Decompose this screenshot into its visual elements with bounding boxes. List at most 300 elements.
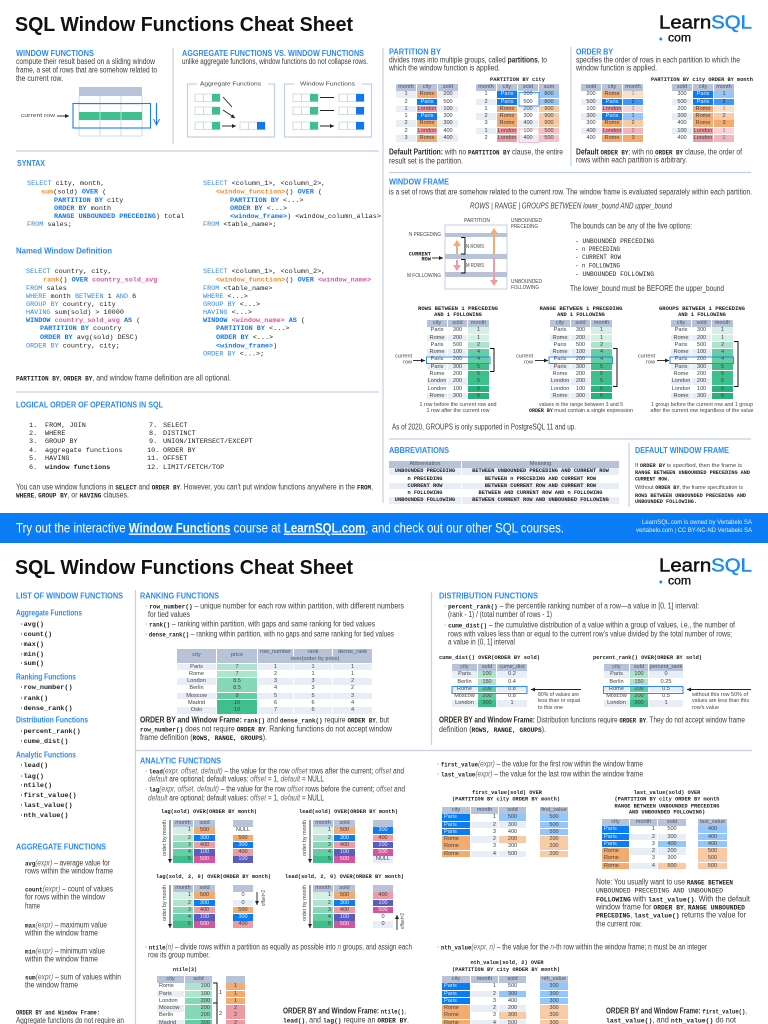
- chart: percent_rank example: 0.5: [662, 693, 670, 699]
- table: CURRENT ROW: [408, 483, 442, 489]
- table: ranking comparison: 2: [351, 678, 354, 684]
- chart: lag example: 400: [200, 842, 209, 848]
- table title: AND 1 FOLLOWING: [557, 312, 605, 318]
- table: partitioned: 500: [523, 99, 533, 105]
- table: ranking comparison: price: [231, 652, 243, 658]
- table: 200: [453, 356, 462, 362]
- chart: lag with offset: 4: [188, 914, 191, 920]
- table: 500: [576, 342, 585, 348]
- chart: percent_rank example: percent_rank() OVER(ORDER BY sold): [593, 655, 702, 661]
- table: Paris: [675, 342, 687, 348]
- table: ranking comparison: rank: [308, 649, 318, 655]
- table: Rome: [674, 349, 688, 355]
- code: syntax template: PARTITION BY <...>: [230, 197, 303, 205]
- panel: logical order of operations: [16, 400, 373, 500]
- chart: last_value example: 2: [652, 834, 655, 840]
- group: ranking: Ranking Functions: [16, 672, 77, 682]
- table title: RANGE BETWEEN 1 PRECEDING: [540, 306, 622, 312]
- chart: lag with offset: 0: [241, 892, 245, 898]
- group: analytic: ·ntile(): [20, 782, 52, 790]
- code: named window template: <window_frame>): [216, 342, 277, 350]
- chart: ntile example: ntile(3): [173, 967, 197, 973]
- chart: percent_rank example: values are less than this: [692, 698, 749, 704]
- lead and lag descriptions: [145, 766, 405, 802]
- table: Paris: [675, 327, 687, 333]
- table: unpartitioned: month: [398, 84, 414, 90]
- table: ranking comparison: 3: [274, 678, 277, 684]
- heading: LIST OF WINDOW FUNCTIONS: [16, 592, 123, 600]
- table: partitioned: 3: [484, 120, 488, 126]
- code: named window template: WHERE <...>: [203, 293, 248, 301]
- bounds list: The bounds can be any of the five options:: [570, 222, 692, 230]
- text: ROWS BETWEEN UNBOUNDED PRECEDING AND: [635, 493, 746, 499]
- chart: lag example: 500: [200, 827, 209, 833]
- table: partitioned: [476, 84, 559, 144]
- chart: lead example: 500: [378, 849, 388, 855]
- diagram: partition bounds: [407, 218, 542, 291]
- chart: cume_dist example: 200: [482, 686, 492, 692]
- heading: DISTRIBUTION FUNCTIONS: [439, 592, 538, 600]
- chart: lead with offset: 300: [340, 900, 349, 906]
- ordered list right: 8.: [149, 430, 157, 438]
- table: 4: [721, 356, 724, 362]
- table: unpartitioned: 2: [404, 120, 408, 126]
- ordered list left: 1.: [29, 422, 37, 430]
- chart: nth_value example: 2: [493, 991, 496, 997]
- order by note: ORDER BY and Window Frame: ntile(),: [283, 1006, 406, 1016]
- chart: lead example: NULL: [376, 856, 390, 862]
- group: aggregate: Aggregate Functions: [16, 608, 83, 618]
- table title: AND 1 FOLLOWING: [434, 312, 482, 318]
- table: Paris: [675, 364, 687, 370]
- chart: lead with offset: month: [315, 885, 331, 891]
- table: unpartitioned: city: [423, 84, 431, 90]
- table: 5: [721, 364, 724, 370]
- chart: lead example: 2: [328, 835, 331, 841]
- chart: nth_value example: Paris: [444, 983, 457, 989]
- definition text: compute their result based on a sliding window: [16, 57, 155, 66]
- table: unordered: Rome: [605, 135, 619, 141]
- note on last_value: window frame for ORDER BY, RANGE UNBOUNDED: [595, 902, 745, 912]
- table: ranking comparison: 4: [351, 707, 354, 713]
- table: ordered: 2: [722, 99, 726, 105]
- table: 200: [576, 356, 585, 362]
- table: ranking comparison: Berlin: [189, 685, 204, 691]
- chart: lead with offset: lead(sold, 2, 0) OVER(ORDER BY month): [285, 874, 404, 880]
- description: window function is applied.: [575, 64, 657, 72]
- table: partitioned: 400: [523, 120, 533, 126]
- chart: lag example: 100: [200, 849, 209, 855]
- table: 6: [477, 393, 480, 399]
- current row marker: row: [646, 360, 656, 366]
- code: named window example: [26, 268, 157, 350]
- chart: percent_rank example: percent_rank: [650, 664, 682, 670]
- table: ranking comparison: 4: [274, 685, 277, 691]
- table: 200: [453, 378, 462, 384]
- heading: WINDOW FUNCTIONS: [16, 49, 94, 58]
- chart: lead with offset: [285, 874, 406, 930]
- table: 1: [477, 327, 480, 333]
- table: Rome: [430, 335, 444, 341]
- table label: PARTITION BY city ORDER BY month: [651, 77, 753, 83]
- order by note: frame definition (ROWS, RANGE, GROUPS).: [140, 733, 267, 743]
- chart: last_value example: last_value(sold) OVER: [634, 790, 701, 796]
- chart: last_value example: 400: [708, 834, 717, 840]
- table: ordered: London: [694, 128, 712, 134]
- order by note: ORDER BY and Window Frame: Distribution functions require ORDER BY. They do not accept window frame: [439, 716, 745, 726]
- ordered list left: 4.: [29, 447, 37, 455]
- table: 100: [697, 349, 706, 355]
- table: ranking comparison: 1: [311, 664, 315, 670]
- chart: first_value example: first_value(sold) OVER: [472, 790, 543, 796]
- table: unordered: month: [625, 84, 641, 90]
- heading: PARTITION BY: [389, 48, 442, 56]
- current row marker: current: [395, 354, 412, 360]
- default partition note: [389, 148, 563, 166]
- diagram: partition bounds: N ROWS: [466, 244, 484, 250]
- table: 100: [576, 386, 585, 392]
- chart: first_value example: 200: [549, 851, 559, 857]
- chart: nth_value example: city: [452, 976, 460, 982]
- table: unpartitioned: 3: [404, 135, 408, 141]
- table: ordered: 1: [722, 91, 726, 97]
- chart: percent_rank example: 200: [634, 693, 644, 699]
- caption: [529, 402, 633, 414]
- table: partitioned: 400: [523, 135, 533, 141]
- chart: lag with offset: offset=2: [261, 890, 267, 906]
- table: [389, 461, 619, 505]
- text: [635, 463, 750, 505]
- table: BETWEEN n PRECEDING AND CURRENT ROW: [485, 476, 596, 482]
- chart: lead with offset: sold: [339, 885, 350, 891]
- table: 5: [721, 371, 724, 377]
- page 2 logo: com: [668, 576, 691, 588]
- table: unpartitioned: 300: [443, 113, 453, 119]
- code: named window example: ORDER BY country, city;: [26, 342, 120, 350]
- table: 100: [576, 349, 585, 355]
- chart: percent_rank example: city: [612, 664, 621, 670]
- code: named window example: SELECT country, city,: [26, 268, 112, 276]
- table: partitioned: 100: [523, 128, 533, 134]
- chart: cume_dist example: to this one: [538, 705, 563, 711]
- page 2 logo: Learn SQL: [659, 554, 752, 576]
- caption: values in the range between 3 and 5: [539, 402, 623, 408]
- ordered list right: ORDER BY: [163, 447, 196, 455]
- ordered list right: 9.: [149, 438, 157, 446]
- table: Rome: [553, 393, 567, 399]
- heading: AGGREGATE FUNCTIONS: [16, 842, 106, 852]
- chart: first_value example: first_value: [541, 807, 567, 813]
- table: BETWEEN CURRENT ROW AND CURRENT ROW: [485, 483, 596, 489]
- table: unordered: Rome: [605, 91, 619, 97]
- ordered list left: [29, 422, 122, 472]
- banner credits: LearnSQL.com is owned by Vertabelo SA: [642, 519, 753, 526]
- order by note: [606, 1006, 747, 1024]
- diagram: partition bounds: UNBOUNDED: [511, 218, 542, 224]
- chart: cume_dist example: 0.4: [508, 679, 516, 685]
- chart: lead example: 1: [328, 827, 331, 833]
- table: Paris: [431, 364, 443, 370]
- chart: ntile example: 200: [201, 1005, 210, 1011]
- chart: nth_value example: 300: [508, 1012, 517, 1018]
- table: unordered: 3: [631, 135, 635, 141]
- ntile description: · ntile(n) – divide rows within a partition as equally as possible into n groups, and assign each: [145, 942, 412, 952]
- table: 1: [600, 327, 603, 333]
- table: unpartitioned: 100: [443, 106, 453, 112]
- default partition note: result set is the partition.: [389, 156, 463, 166]
- code: syntax example: SELECT city, month,: [27, 180, 105, 188]
- group: analytic: Analytic Functions: [16, 750, 77, 760]
- chart: nth_value example: 200: [508, 1005, 517, 1011]
- table: London: [672, 386, 690, 392]
- chart: first_value example: 500: [549, 829, 559, 835]
- chart: first_value example: Rome: [444, 836, 459, 842]
- chart: percent_rank example: 0.25: [661, 679, 671, 685]
- table: BETWEEN AND CURRENT ROW AND n FOLLOWING: [479, 490, 602, 496]
- ordered list left: 3.: [29, 438, 37, 446]
- chart: ntile example: 200: [201, 998, 210, 1004]
- ntile description: [145, 942, 412, 960]
- table: 100: [697, 386, 706, 392]
- table: partitioned: month: [478, 84, 494, 90]
- chart: lead with offset: 500: [378, 907, 388, 913]
- code: named window template: ORDER BY <...>;: [203, 350, 264, 358]
- function descriptions: the window frame: [25, 980, 78, 990]
- table: Paris: [554, 364, 566, 370]
- diagram: partition bounds: N PRECEDING: [409, 232, 441, 238]
- chart: lead example: [299, 809, 398, 864]
- table: city: [556, 320, 564, 326]
- current row marker: [516, 348, 617, 386]
- chart: first_value example: 3: [493, 829, 496, 835]
- chart: lag example: 500: [200, 856, 209, 862]
- chart: lag with offset: 400: [238, 921, 248, 927]
- heading: named window definition: Named Window Definition: [16, 246, 112, 256]
- table: unordered: 200: [586, 91, 596, 97]
- table: 2: [600, 342, 603, 348]
- table: London: [428, 386, 446, 392]
- chart: nth_value example: (PARTITION BY city ORDER BY month): [452, 967, 560, 973]
- table: Rome: [674, 371, 688, 377]
- chart: lead with offset: 400: [378, 892, 388, 898]
- table: ranking comparison: city: [192, 652, 201, 658]
- group: analytic: ·nth_value(): [20, 812, 68, 820]
- table: 5: [600, 371, 603, 377]
- diagram: partition bounds: UNBOUNDED: [511, 279, 542, 285]
- table: 500: [453, 342, 462, 348]
- chart: first_value example: Paris: [444, 814, 457, 820]
- chart: lead example: month: [315, 820, 331, 826]
- chart: lag example: order by month: [162, 820, 168, 856]
- group: distribution: ·cume_dist(): [20, 738, 68, 746]
- chart: nth_value example: 1: [493, 983, 496, 989]
- code: named window template: PARTITION BY <...>: [216, 325, 289, 333]
- descriptions: · last_value(expr) – the value for the last row within the window frame: [437, 770, 643, 780]
- table: ordered: city: [699, 84, 707, 90]
- chart: lag example: 300: [200, 835, 209, 841]
- table: unpartitioned: 400: [443, 135, 453, 141]
- chart: percent_rank example: 0.5: [662, 686, 670, 692]
- chart: first_value example: [442, 790, 568, 859]
- chart: lag with offset: 2: [188, 900, 191, 906]
- text: RANGE BETWEEN UNBOUNDED PRECEDING AND: [635, 470, 750, 476]
- chart: last_value example: 3: [652, 841, 655, 847]
- table: Paris: [554, 327, 566, 333]
- table: month: [471, 320, 486, 326]
- table: Rome: [430, 393, 444, 399]
- chart: nth_value example: 300: [549, 991, 559, 997]
- chart: lead with offset: 5: [328, 921, 331, 927]
- banner credits: [636, 519, 753, 534]
- chart: lead with offset: 4: [328, 914, 331, 920]
- chart: cume_dist example: 0.2: [508, 671, 516, 677]
- group: ranking: [16, 672, 77, 713]
- description: which the window function is applied.: [388, 64, 500, 72]
- chart: lead example: 500: [340, 827, 349, 833]
- table: unordered: London: [603, 128, 621, 134]
- chart: cume_dist example: Moscow: [454, 693, 475, 699]
- table: ordered: 500: [677, 99, 687, 105]
- table: partitioned: 900: [544, 120, 554, 126]
- table: unpartitioned: sold: [443, 84, 453, 90]
- chart: ntile example: 100: [201, 991, 210, 997]
- group: distribution: ·percent_rank(): [20, 728, 81, 736]
- chart: last_value example: [602, 790, 727, 871]
- chart: lead example: 100: [378, 842, 388, 848]
- code: named window template: [203, 268, 371, 358]
- example: rows between: [395, 306, 498, 414]
- heading: AGGREGATE FUNCTIONS VS. WINDOW FUNCTIONS: [182, 49, 364, 58]
- table label: PARTITION BY city: [490, 77, 546, 83]
- table: 300: [697, 327, 706, 333]
- chart: first_value example: 200: [549, 843, 559, 849]
- chart: cume_dist example: Berlin: [457, 679, 472, 685]
- chart: lag with offset: 300: [200, 900, 209, 906]
- table: ordered: 200: [677, 106, 687, 112]
- note: PARTITION BY, ORDER BY, and window frame definition are all optional.: [16, 374, 231, 384]
- table title: ROWS BETWEEN 1 PRECEDING: [418, 306, 498, 312]
- chart: percent_rank example: Moscow: [606, 693, 627, 699]
- heading: DEFAULT WINDOW FRAME: [635, 446, 729, 455]
- table: ordered: 400: [677, 120, 687, 126]
- function descriptions: max(expr) – maximum value: [25, 920, 107, 930]
- chart: ntile example: 2: [219, 1011, 222, 1017]
- chart: last_value example: Paris: [604, 834, 617, 840]
- chart: lag example: 4: [188, 849, 191, 855]
- table: ordered: 2: [722, 113, 726, 119]
- code: syntax template: <window_frame>) <window_column_alias>: [230, 213, 381, 221]
- chart: lag with offset: 3: [188, 907, 191, 913]
- diagram: partition bounds: FOLLOWING: [511, 285, 539, 291]
- panel: first, last and nth value: [437, 760, 751, 1024]
- table: unordered: 2: [631, 120, 635, 126]
- code: named window example: WHERE month BETWEEN 1 AND 6: [26, 293, 136, 301]
- ordered list right: UNION/INTERSECT/EXCEPT: [163, 438, 253, 446]
- table: ranking comparison: 2: [351, 685, 354, 691]
- table: ranking comparison: 1: [351, 671, 354, 677]
- table: Rome: [674, 335, 688, 341]
- note: [16, 482, 373, 500]
- table: Rome: [430, 371, 444, 377]
- chart: nth_value example: 3: [493, 1012, 496, 1018]
- chart: last_value example: 500: [667, 826, 677, 832]
- diagram: aggregate functions: Aggregate Functions: [200, 82, 261, 88]
- diagram: window functions: [284, 82, 372, 137]
- chart: last_value example: Paris: [604, 826, 617, 832]
- chart: lag example: 500: [238, 835, 248, 841]
- order by note: definition (ROWS, RANGE, GROUPS).: [439, 725, 546, 735]
- description: unlike aggregate functions, window functions do not collapse rows.: [182, 57, 368, 66]
- code: named window template: ORDER BY <...>: [216, 334, 273, 342]
- chart: first_value example: 300: [508, 843, 517, 849]
- chart: last_value example: month: [636, 819, 651, 825]
- chart: nth_value example: Paris: [444, 998, 457, 1004]
- chart: lead example: 300: [340, 835, 349, 841]
- table: ordered: 100: [677, 128, 687, 134]
- table: partitioned: Paris: [501, 99, 513, 105]
- table: partitioned: 500: [544, 135, 554, 141]
- table: sold: [575, 320, 586, 326]
- table: ordered: 300: [677, 113, 687, 119]
- chart: lag example: 1: [188, 827, 191, 833]
- table: partitioned: Rome: [500, 106, 514, 112]
- chart: first_value example: 1: [493, 814, 496, 820]
- panel: default window frame: [635, 446, 750, 505]
- table: 2: [477, 342, 480, 348]
- text: If ORDER BY is specified, then the frame is: [635, 463, 742, 469]
- group: analytic: ·first_value(): [20, 792, 77, 800]
- function descriptions: [444, 602, 736, 646]
- chart: first_value example: 200: [549, 836, 559, 842]
- table: ordered: 300: [677, 91, 687, 97]
- chart: last_value example: sold: [667, 819, 677, 825]
- ordered list right: [147, 422, 253, 472]
- chart: first_value example: 400: [508, 829, 517, 835]
- chart: last_value example: 400: [708, 826, 717, 832]
- function descriptions: [24, 858, 121, 990]
- chart: first_value example: Paris: [444, 829, 457, 835]
- chart: lead with offset: 100: [378, 900, 388, 906]
- chart: first_value example: 500: [549, 822, 559, 828]
- chart: first_value example: 3: [493, 843, 496, 849]
- text: UNBOUNDED FOLLOWING.: [635, 499, 697, 505]
- panel: window functions: [16, 49, 158, 136]
- chart: lead with offset: 3: [328, 907, 331, 913]
- chart: last_value example: RANGE BETWEEN UNBOUNDED PRECEDING: [615, 804, 719, 810]
- table: partitioned: 900: [544, 106, 554, 112]
- table: unpartitioned: Paris: [421, 99, 433, 105]
- chart: percent_rank example: Rome: [609, 686, 624, 692]
- note on last_value: UNBOUNDED PRECEDING AND UNBOUNDED: [596, 888, 723, 896]
- table: Rome: [553, 349, 567, 355]
- chart: lag example: 400: [238, 849, 248, 855]
- table: 300: [453, 327, 462, 333]
- diagram: sliding window over table: current row: [21, 113, 56, 119]
- chart: lead with offset: 0: [381, 921, 385, 927]
- table: ordered: 400: [677, 135, 687, 141]
- diagram: partition bounds: M FOLLOWING: [407, 273, 441, 279]
- chart: last_value example: 400: [667, 841, 677, 847]
- table: unpartitioned: Rome: [420, 135, 434, 141]
- default order by note: rows within each partition is arbitrary.: [576, 156, 687, 164]
- chart: lead example: 400: [378, 835, 388, 841]
- table: ordered: London: [694, 135, 712, 141]
- chart: first_value example: 2: [493, 836, 496, 842]
- chart: percent_rank example: 1: [664, 700, 668, 706]
- table: ranking comparison: 6: [274, 700, 277, 706]
- chart: nth_value example: 300: [549, 983, 559, 989]
- table: unordered: London: [603, 106, 621, 112]
